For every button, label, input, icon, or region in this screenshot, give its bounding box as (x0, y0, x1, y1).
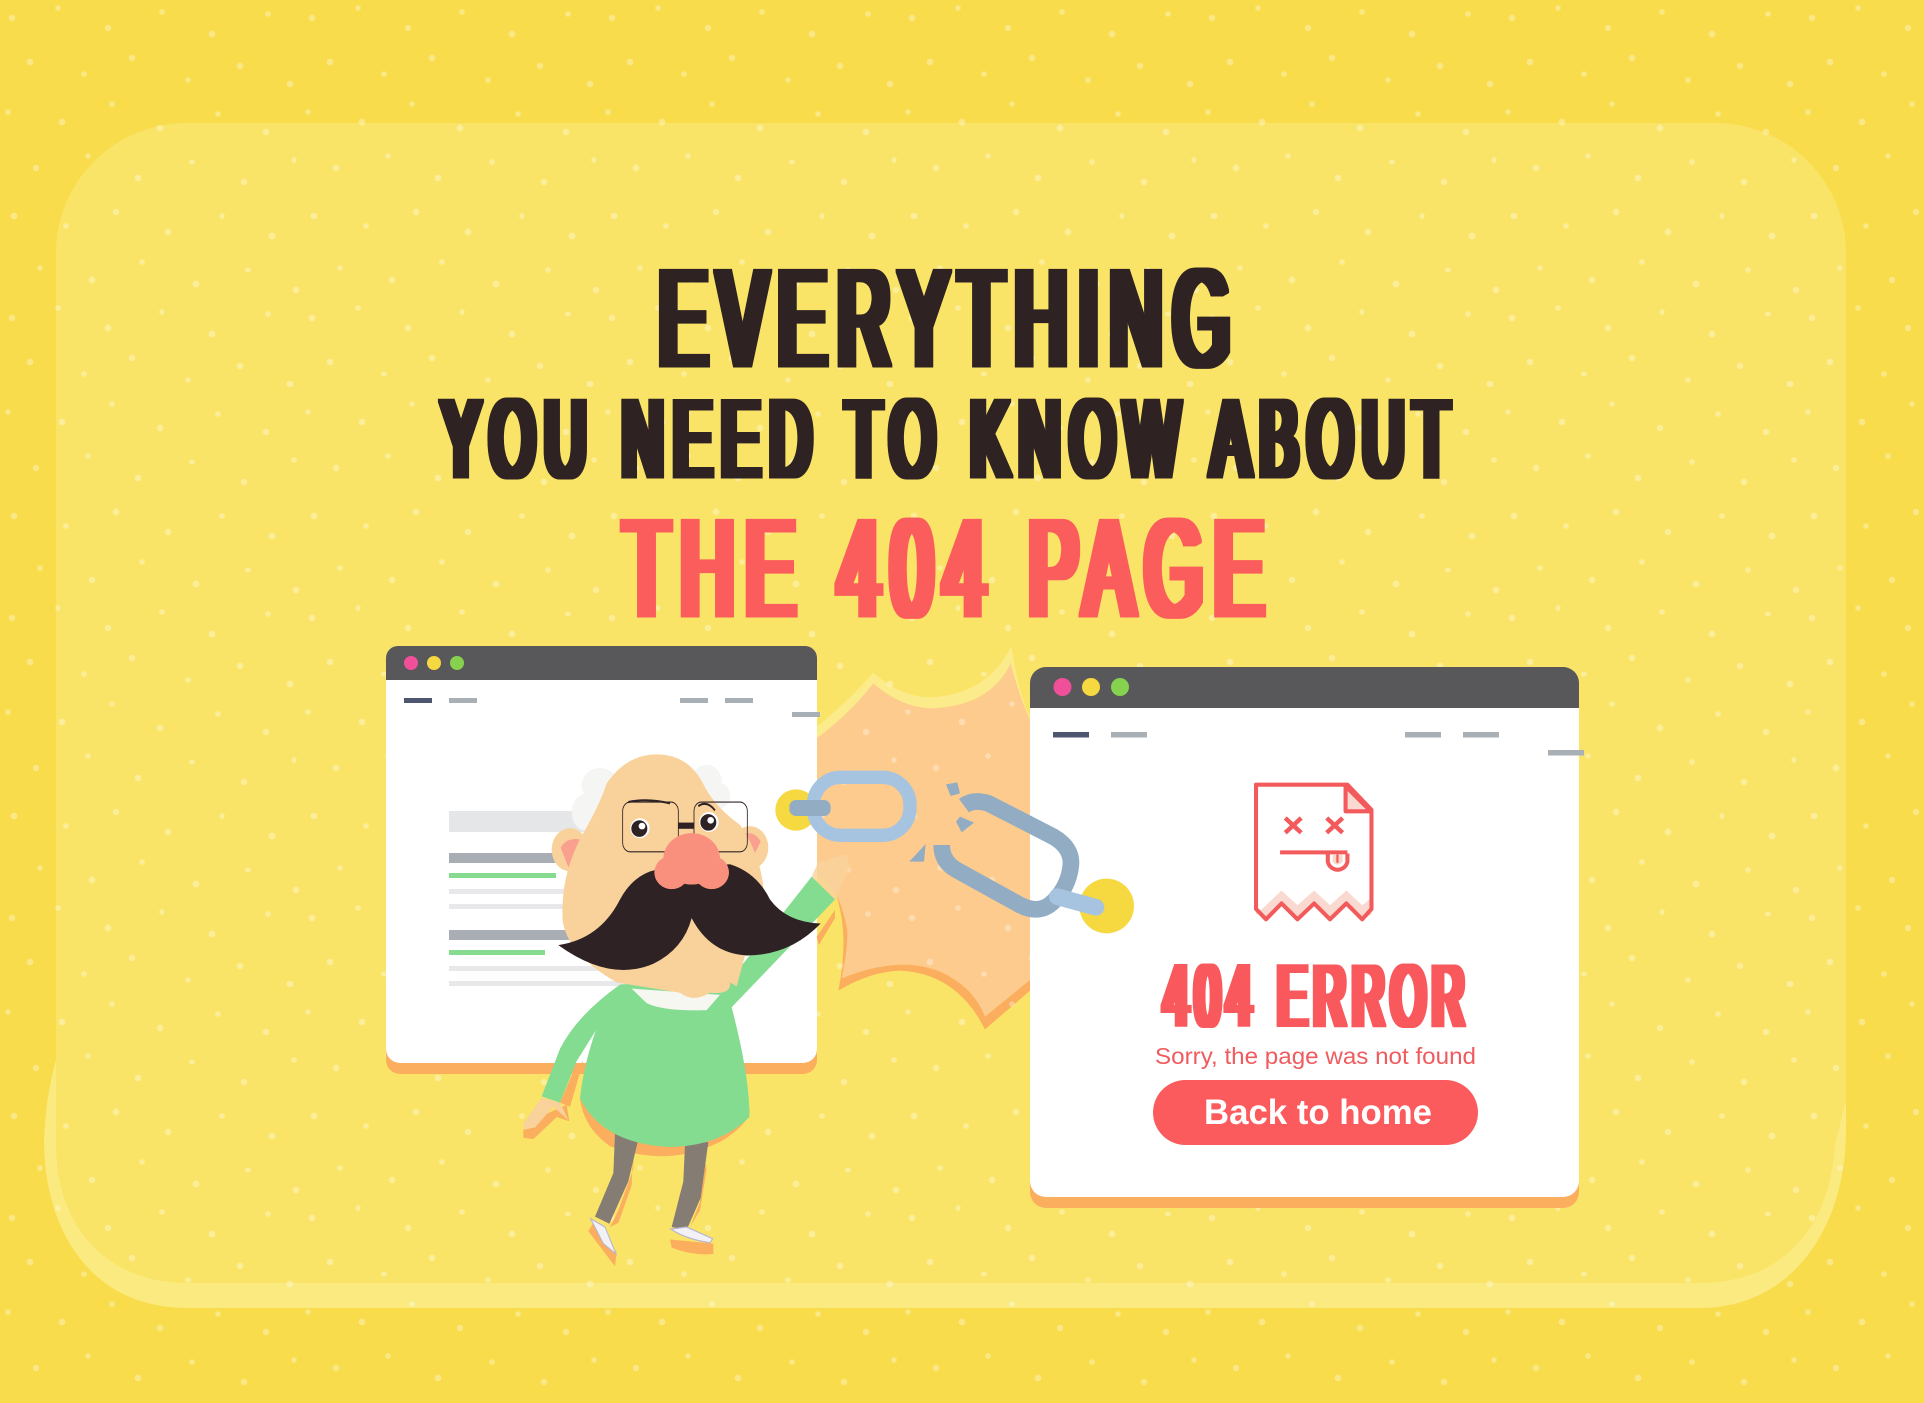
legs (595, 1134, 708, 1230)
window shadow (386, 1000, 817, 1074)
button: back to home (1153, 1080, 1478, 1145)
left browser window (386, 646, 820, 1074)
icon: dead page document (1256, 785, 1371, 919)
window body (386, 680, 817, 1063)
window shadow (1030, 1100, 1579, 1208)
ears (552, 826, 768, 871)
right browser window: 404 ERROR (1164, 946, 1471, 1045)
raised hand (812, 854, 850, 902)
hair (572, 765, 730, 831)
window buttons (404, 656, 464, 670)
right pin (1057, 897, 1096, 907)
left arm and hand (523, 1098, 568, 1130)
panel lip (44, 1000, 1846, 1308)
title line 1: EVERYTHING (659, 241, 1241, 396)
sweater (580, 877, 835, 1147)
character: man with moustache (523, 754, 850, 1266)
window body (1030, 708, 1579, 1197)
intact link (813, 777, 910, 835)
nav bars (1053, 732, 1584, 756)
window buttons (1054, 678, 1129, 696)
head (562, 754, 763, 998)
shadows (523, 910, 835, 1266)
title bar (386, 646, 817, 680)
nav bars (404, 698, 820, 717)
eyes (630, 812, 719, 838)
right browser window (1030, 667, 1584, 1208)
right yellow anchor (1079, 879, 1134, 933)
burst: torn hole between the pages (817, 646, 1030, 1029)
glasses (623, 800, 747, 852)
shoes (591, 1219, 713, 1254)
collar (632, 989, 720, 1010)
left pin (789, 800, 831, 816)
moustache (558, 864, 821, 970)
title (442, 241, 1459, 646)
title bar (1030, 667, 1579, 708)
button: back to home: Back to home (1204, 1093, 1432, 1132)
page content lines (449, 811, 639, 986)
error message: Sorry, the page was not found (1155, 1043, 1476, 1069)
nose (654, 833, 729, 889)
broken link (942, 801, 1071, 909)
central panel (56, 123, 1846, 1283)
left yellow anchor (775, 789, 817, 831)
icon: broken chain (775, 777, 1134, 933)
link shards (909, 782, 974, 862)
title line 3: THE 404 PAGE (624, 491, 1275, 646)
